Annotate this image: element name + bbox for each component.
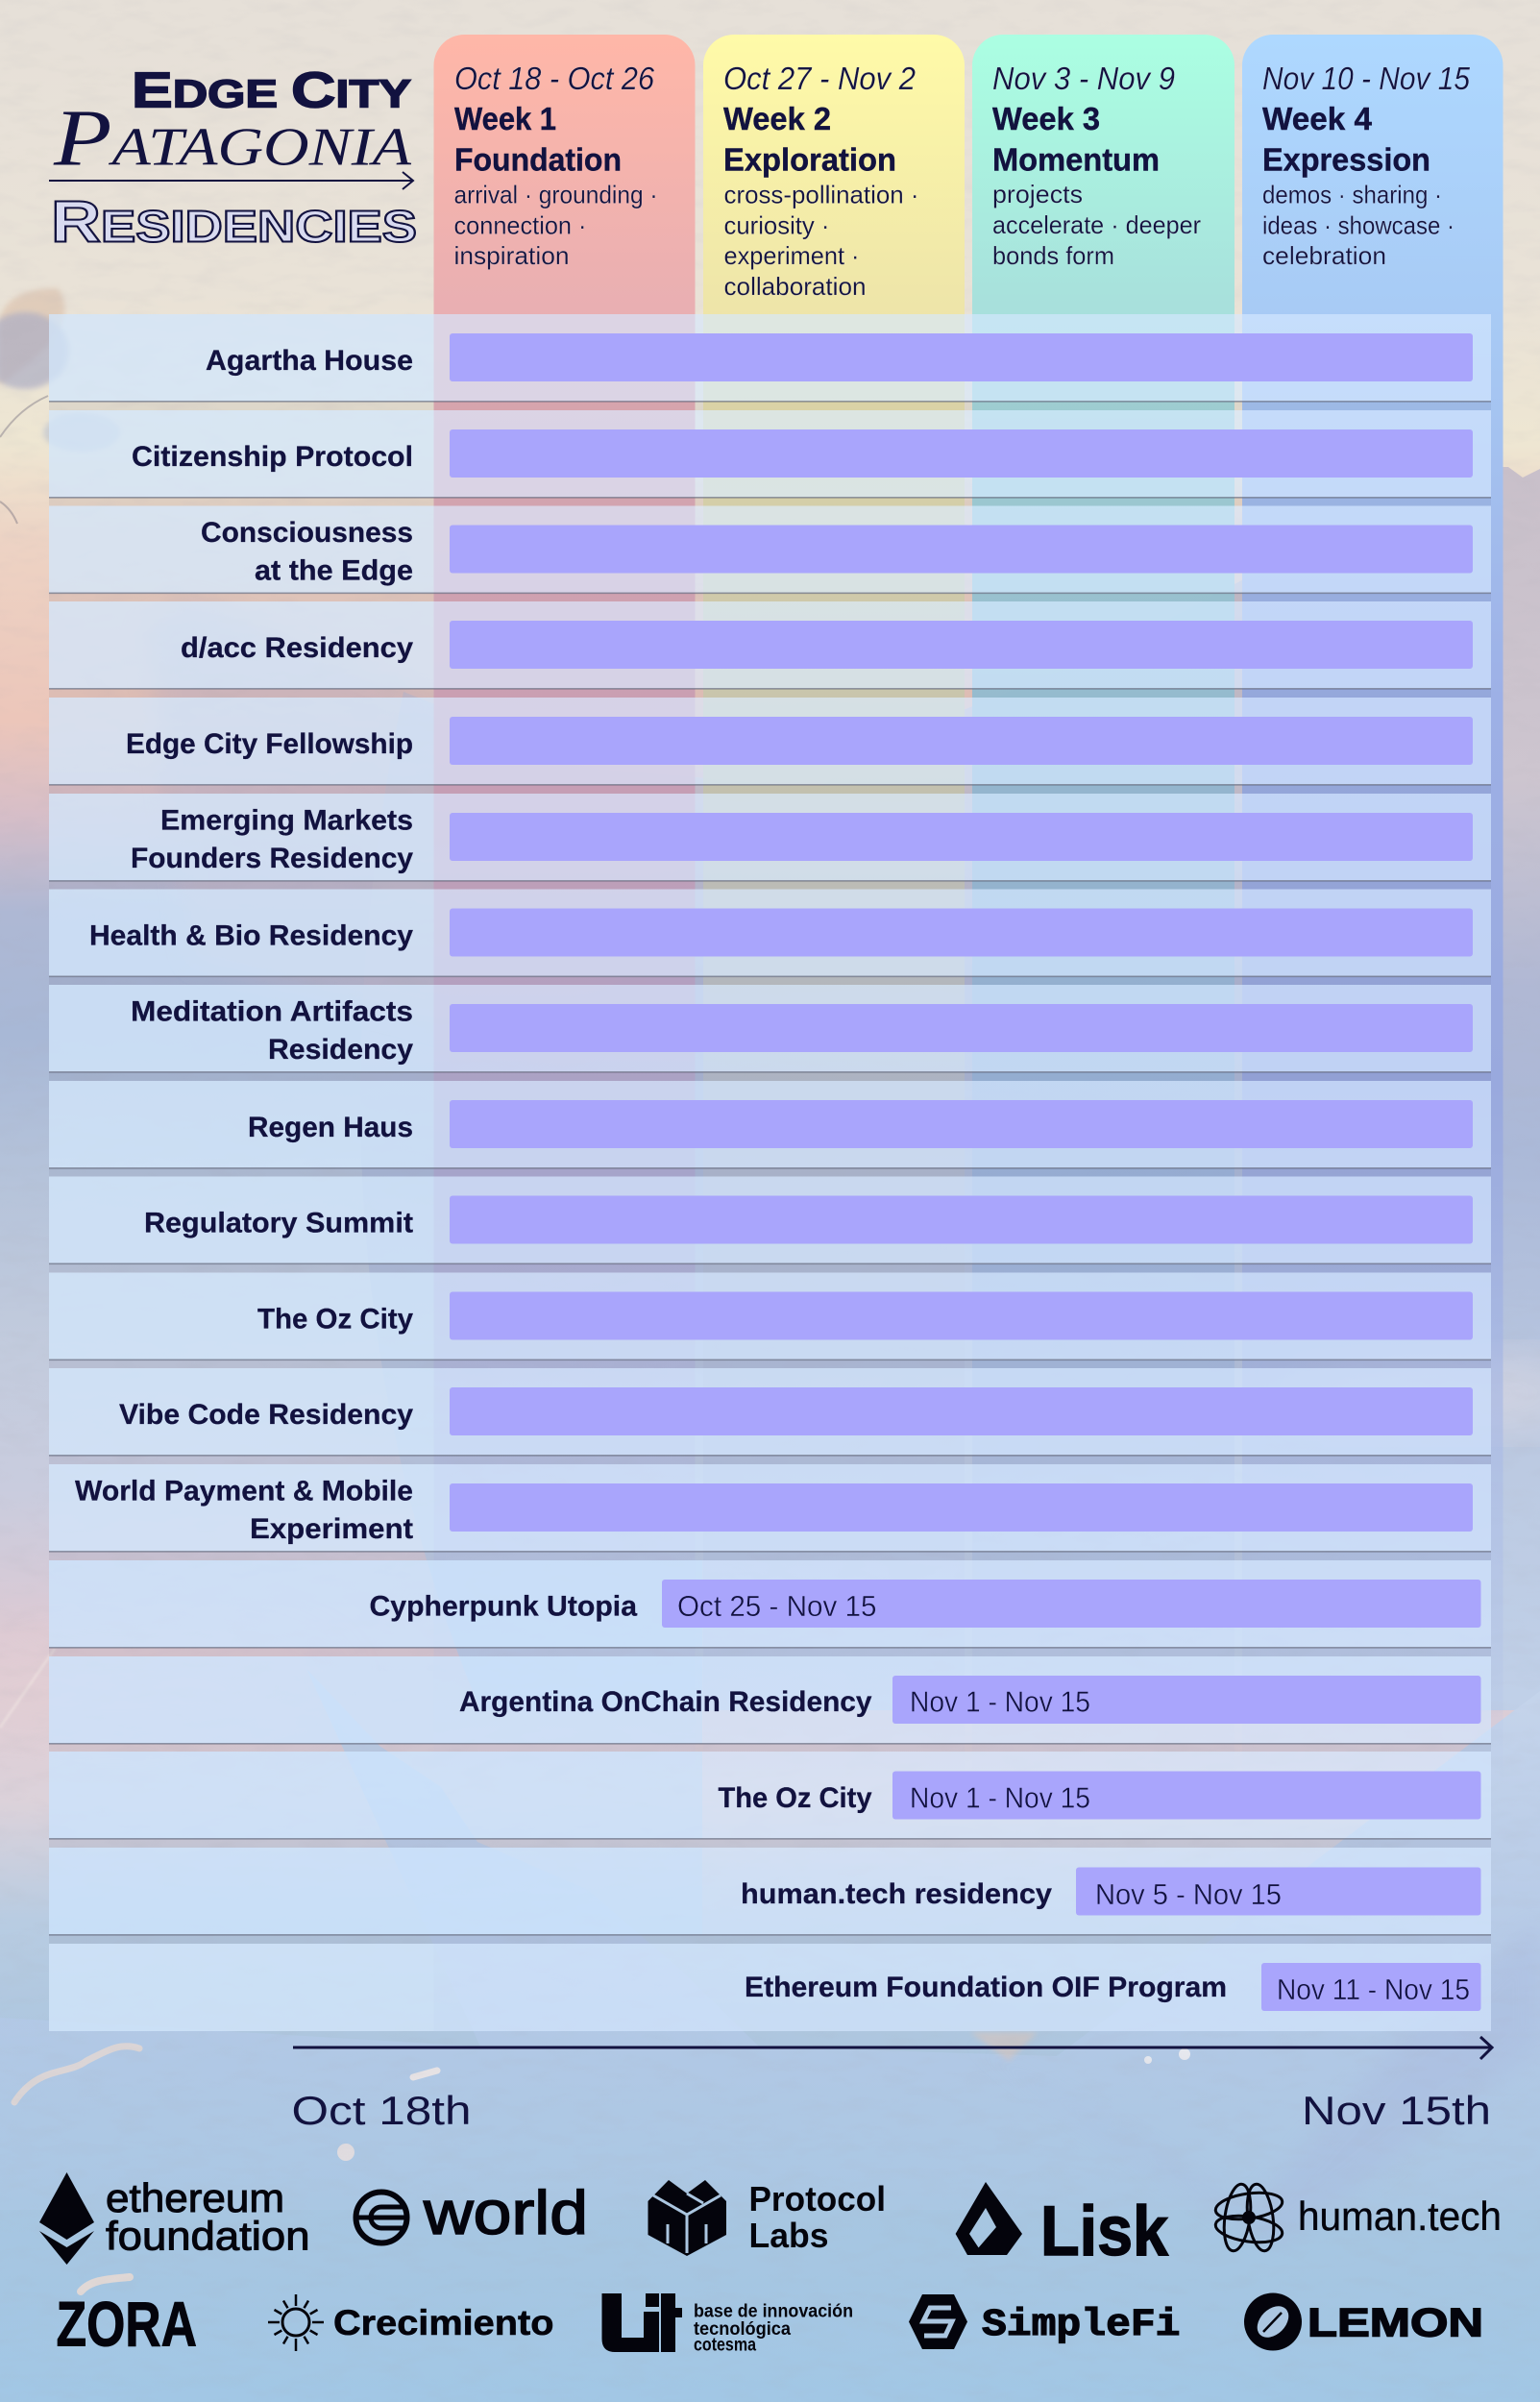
row: Agartha House <box>49 314 1491 410</box>
logo: bit base de innovacion tecnologica cotesma: base de innovación <box>694 2302 853 2321</box>
week 1 header: inspiration <box>453 241 569 270</box>
week 4 header: Nov 10 - Nov 15 <box>1262 61 1471 96</box>
row: Argentina OnChain Residency <box>49 1656 1491 1752</box>
row: Cypherpunk Utopia: Oct 25 - Nov 15 <box>677 1589 876 1623</box>
row: Ethereum Foundation OIF Program <box>49 1944 1491 2031</box>
timeline arrow <box>293 2037 1492 2059</box>
week 4 header <box>1262 61 1471 270</box>
row: World Payment & Mobile Experiment: Experiment <box>250 1513 413 1545</box>
logo: Crecimiento: Crecimiento <box>333 2303 553 2342</box>
week 2 header: Exploration <box>723 142 896 177</box>
logo: Lisk <box>956 2182 1168 2270</box>
row: Ethereum Foundation OIF Program: Nov 11 - Nov 15 <box>1277 1973 1470 2006</box>
logo: world <box>355 2178 588 2247</box>
logo: Protocol Labs <box>648 2179 886 2256</box>
week 1 header <box>453 61 657 270</box>
week 4 header: celebration <box>1262 241 1386 270</box>
row: Meditation Artifacts Residency <box>49 985 1491 1081</box>
row: Emerging Markets Founders Residency: Emerging Markets <box>160 805 413 836</box>
title: Patagonia: PATAGONIA <box>53 94 412 183</box>
week 3 header: Week 3 <box>992 101 1100 136</box>
week 1 header: Week 1 <box>454 101 556 136</box>
row: Cypherpunk Utopia <box>49 1560 1491 1656</box>
logo: world: world <box>423 2178 588 2247</box>
week 3 header <box>992 61 1201 270</box>
row: Edge City Fellowship: Edge City Fellowship <box>126 728 413 760</box>
week 3 header: Nov 3 - Nov 9 <box>992 61 1175 96</box>
row: Health & Bio Residency: Health & Bio Residency <box>89 920 413 951</box>
week 1 header: arrival · grounding · <box>453 181 657 209</box>
row: Regen Haus <box>49 1081 1491 1176</box>
row: The Oz City (November): The Oz City <box>719 1782 872 1814</box>
row: Cypherpunk Utopia: Cypherpunk Utopia <box>369 1591 637 1622</box>
row: d/acc Residency <box>49 601 1491 698</box>
row: human.tech residency: human.tech residency <box>741 1878 1052 1910</box>
row: Meditation Artifacts Residency: Residency <box>268 1034 413 1066</box>
logo: bit base de innovacion tecnologica cotesma: cotesma <box>694 2335 756 2356</box>
week 2 header: collaboration <box>724 272 867 301</box>
row: The Oz City <box>49 1272 1491 1368</box>
week 1 header: connection · <box>453 211 586 240</box>
week 3 header: bonds form <box>992 241 1114 270</box>
row: d/acc Residency: d/acc Residency <box>181 632 413 664</box>
row: Argentina OnChain Residency: Argentina OnChain Residency <box>459 1686 872 1718</box>
week 3 header: accelerate · deeper <box>992 210 1201 239</box>
row: Agartha House: Agartha House <box>206 345 413 377</box>
row: The Oz City (November) <box>49 1752 1491 1848</box>
logo: Zora: ZORA <box>56 2289 197 2360</box>
week column backgrounds <box>434 35 1503 1787</box>
row: human.tech residency <box>49 1848 1491 1944</box>
logo: SimpleFi: SimpleFi <box>982 2304 1180 2347</box>
week 3 header: projects <box>992 180 1083 208</box>
timeline start label: Oct 18th <box>292 2088 471 2133</box>
timeline end label: Nov 15th <box>1302 2088 1491 2133</box>
row: Consciousness at the Edge <box>49 505 1491 601</box>
logo: Lisk: Lisk <box>1040 2193 1168 2270</box>
week 4 header: ideas · showcase · <box>1262 211 1454 240</box>
row: The Oz City: The Oz City <box>257 1303 413 1336</box>
row: The Oz City (November): Nov 1 - Nov 15 <box>910 1781 1090 1814</box>
row: Citizenship Protocol <box>49 410 1491 505</box>
title: Edge City: EDGE CITY <box>132 63 411 119</box>
row: Argentina OnChain Residency: Nov 1 - Nov 15 <box>910 1685 1090 1718</box>
row: Regulatory Summit: Regulatory Summit <box>144 1207 413 1239</box>
week 1 header: Foundation <box>454 142 622 177</box>
logo: Crecimiento <box>268 2294 553 2351</box>
logo: Protocol Labs: Protocol <box>749 2179 886 2218</box>
row: Vibe Code Residency: Vibe Code Residency <box>119 1399 413 1431</box>
logo: Lemon <box>1244 2292 1483 2350</box>
logo: ethereum foundation: ethereum <box>106 2175 284 2220</box>
week 2 header: cross-pollination · <box>724 181 918 209</box>
row: Edge City Fellowship <box>49 698 1491 794</box>
row: Health & Bio Residency <box>49 890 1491 985</box>
row: Emerging Markets Founders Residency: Founders Residency <box>131 843 413 874</box>
row: Consciousness at the Edge: at the Edge <box>255 555 413 586</box>
logo: bit base de innovacion tecnologica cotesma <box>601 2293 853 2356</box>
week 4 header: demos · sharing · <box>1262 181 1442 209</box>
week 1 header: Oct 18 - Oct 26 <box>454 61 655 96</box>
logo: ethereum foundation: foundation <box>106 2214 309 2258</box>
row: Consciousness at the Edge: Consciousness <box>201 517 413 549</box>
week 4 header: Week 4 <box>1262 101 1373 136</box>
logo: Lemon: LEMON <box>1308 2300 1483 2344</box>
week 2 header: experiment · <box>724 241 859 270</box>
row: Meditation Artifacts Residency: Meditation Artifacts <box>131 995 413 1028</box>
row: Emerging Markets Founders Residency <box>49 794 1491 890</box>
logo: bit base de innovacion tecnologica cotesma: tecnológica <box>694 2319 791 2340</box>
week 2 header: Week 2 <box>723 101 831 136</box>
logo: human.tech: human.tech <box>1298 2194 1502 2239</box>
week 2 header: curiosity · <box>724 211 830 240</box>
week 2 header: Oct 27 - Nov 2 <box>723 61 916 96</box>
title block <box>49 63 417 254</box>
title arrow <box>49 172 413 189</box>
row: World Payment & Mobile Experiment: World Payment & Mobile <box>75 1476 413 1507</box>
week 2 header <box>723 61 918 301</box>
row: World Payment & Mobile Experiment <box>49 1464 1491 1560</box>
row: Regen Haus: Regen Haus <box>248 1112 413 1143</box>
title: Residencies: RESIDENCIES <box>51 188 417 254</box>
week 3 header: Momentum <box>992 142 1160 177</box>
logo: Protocol Labs: Labs <box>749 2216 828 2255</box>
logo: ethereum foundation <box>39 2172 309 2265</box>
week 4 header: Expression <box>1262 142 1430 177</box>
row: Regulatory Summit <box>49 1176 1491 1272</box>
row: Citizenship Protocol: Citizenship Protocol <box>132 441 413 473</box>
logo: SimpleFi <box>909 2294 1180 2349</box>
logo: human.tech <box>1214 2183 1502 2252</box>
row: human.tech residency: Nov 5 - Nov 15 <box>1095 1877 1282 1911</box>
row: Ethereum Foundation OIF Program: Ethereum Foundation OIF Program <box>745 1972 1227 2003</box>
row: Vibe Code Residency <box>49 1368 1491 1464</box>
